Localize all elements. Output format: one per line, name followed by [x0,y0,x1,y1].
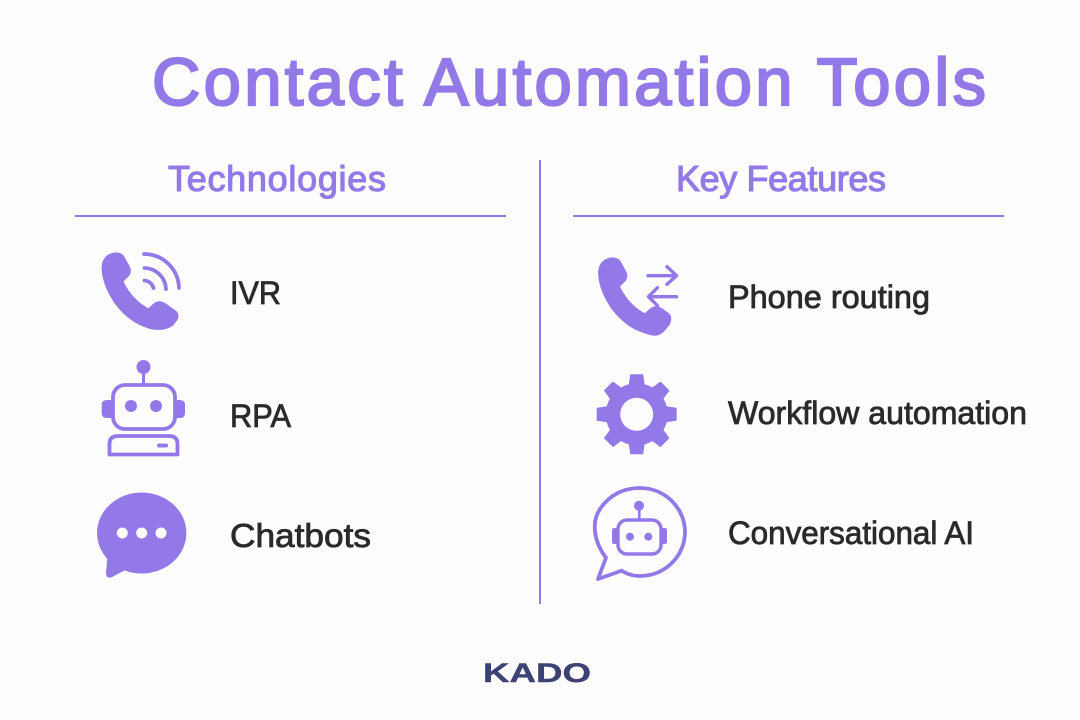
icon: phone with routing arrows [598,257,676,336]
panel: technologies [75,158,506,577]
label: Chatbots: Chatbots [230,517,371,554]
heading rule: key features [573,215,1004,217]
label: Conversational AI: Conversational AI [728,515,974,551]
icon: phone with signal [102,252,179,330]
icon: gear [597,375,676,454]
icon: robot [102,360,185,454]
label: Phone routing: Phone routing [728,279,930,315]
logo: KADO: KADO [483,658,591,688]
label: Workflow automation: Workflow automation [728,395,1027,431]
label: RPA: RPA [230,398,292,434]
label: IVR: IVR [230,275,281,311]
icon: robot in speech bubble [595,488,685,579]
heading: key features: Key Features [676,158,886,199]
title: Contact Automation Tools [152,45,986,120]
panel: key features [573,158,1027,579]
heading rule: technologies [75,215,506,217]
icon: chat bubble [97,492,186,577]
heading: technologies: Technologies [168,158,386,199]
center divider [539,160,541,604]
